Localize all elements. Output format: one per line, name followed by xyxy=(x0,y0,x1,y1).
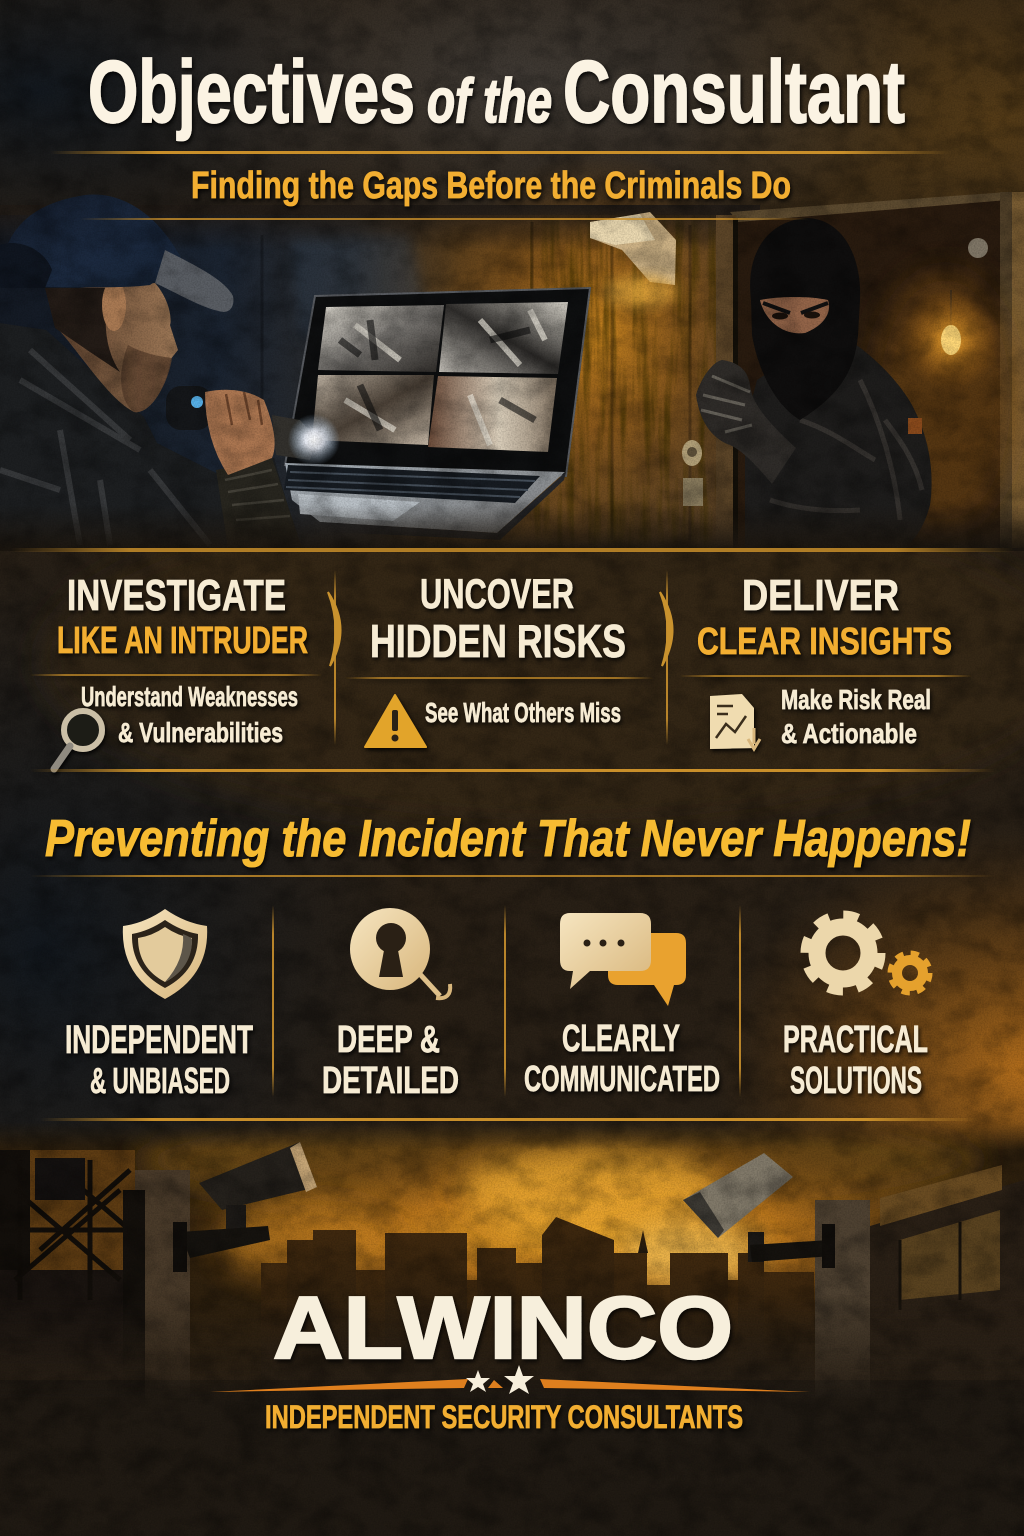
hero scene: consultant, laptop, intruder xyxy=(0,150,1024,551)
title: Objectives xyxy=(88,42,415,141)
panel: independent and unbiased xyxy=(65,909,253,1101)
section rule xyxy=(40,1118,980,1121)
panel: investigate: LIKE AN INTRUDER xyxy=(57,620,308,662)
icon: keyhole magnifier xyxy=(350,908,450,998)
title: of the xyxy=(427,67,552,136)
icon: magnifying glass xyxy=(54,711,102,769)
panel: uncover: See What Others Miss xyxy=(425,697,621,728)
subtitle: Finding the Gaps Before the Criminals Do xyxy=(191,165,791,207)
panel: deep and detailed xyxy=(322,908,459,1102)
panel: investigate: Understand Weaknesses xyxy=(81,681,298,712)
hero wall xyxy=(0,150,765,550)
icon: shield xyxy=(123,909,207,999)
skyline buildings xyxy=(261,1217,814,1326)
hero bottom fade xyxy=(0,505,1024,551)
panel: deliver: & Actionable xyxy=(781,718,917,749)
panel: practical solutions: SOLUTIONS xyxy=(790,1060,922,1102)
panel: uncover xyxy=(345,570,653,747)
title: Consultant xyxy=(563,42,905,141)
panel: practical solutions xyxy=(783,916,929,1102)
divider xyxy=(504,905,506,1097)
icon: speech bubbles xyxy=(560,913,686,1006)
divider xyxy=(739,905,741,1097)
panel: clearly communicated: CLEARLY xyxy=(562,1018,680,1060)
hero divider band xyxy=(10,548,1014,552)
title xyxy=(88,42,905,141)
left scaffolding and pillar xyxy=(0,1150,190,1369)
door knob and plate xyxy=(682,440,703,506)
panel: clearly communicated xyxy=(524,913,720,1099)
left security camera xyxy=(173,1142,317,1272)
panel: investigate: & Vulnerabilities xyxy=(118,717,283,748)
panel: independent and unbiased: INDEPENDENT xyxy=(65,1018,253,1062)
panel: investigate xyxy=(30,571,322,769)
logo rule xyxy=(210,1379,810,1392)
flashlight and hands xyxy=(166,386,340,475)
icon: report document xyxy=(710,694,760,749)
right security camera xyxy=(683,1153,835,1268)
logo: ALWINCO: ALWINCO xyxy=(273,1278,733,1377)
panel: deliver: DELIVER xyxy=(742,571,899,620)
panel: deliver xyxy=(680,571,972,749)
divider xyxy=(272,905,274,1097)
intruder xyxy=(696,218,932,548)
panel: uncover: HIDDEN RISKS xyxy=(370,615,626,667)
panel: deep and detailed: DETAILED xyxy=(322,1060,459,1102)
wall lamp xyxy=(590,212,676,308)
title rule xyxy=(50,151,950,154)
hanging bulb xyxy=(901,290,1001,390)
chevron divider 2 xyxy=(660,570,673,745)
right pillar and building xyxy=(815,1165,1022,1376)
open door and interior xyxy=(682,192,1024,548)
panel: investigate: INVESTIGATE xyxy=(67,571,286,620)
chevron divider 1 xyxy=(328,570,341,745)
laptop xyxy=(284,288,590,540)
panel: uncover: UNCOVER xyxy=(420,570,574,617)
panel: clearly communicated: COMMUNICATED xyxy=(524,1058,720,1099)
panel: deep and detailed: DEEP & xyxy=(337,1019,440,1061)
panel: practical solutions: PRACTICAL xyxy=(783,1019,928,1061)
logo stars xyxy=(466,1365,534,1394)
panel: independent and unbiased: & UNBIASED xyxy=(90,1060,230,1101)
icon: warning triangle xyxy=(365,695,426,747)
panel: deliver: CLEAR INSIGHTS xyxy=(697,621,952,663)
logo: ALWINCO xyxy=(210,1278,810,1435)
section rule xyxy=(30,769,995,772)
logo tagline: INDEPENDENT SECURITY CONSULTANTS xyxy=(265,1399,743,1435)
gloved hand xyxy=(696,360,796,484)
panel: deliver: Make Risk Real xyxy=(781,684,931,715)
icon: gears xyxy=(806,916,929,992)
skyline scene xyxy=(0,1124,1024,1381)
consultant xyxy=(0,195,340,548)
